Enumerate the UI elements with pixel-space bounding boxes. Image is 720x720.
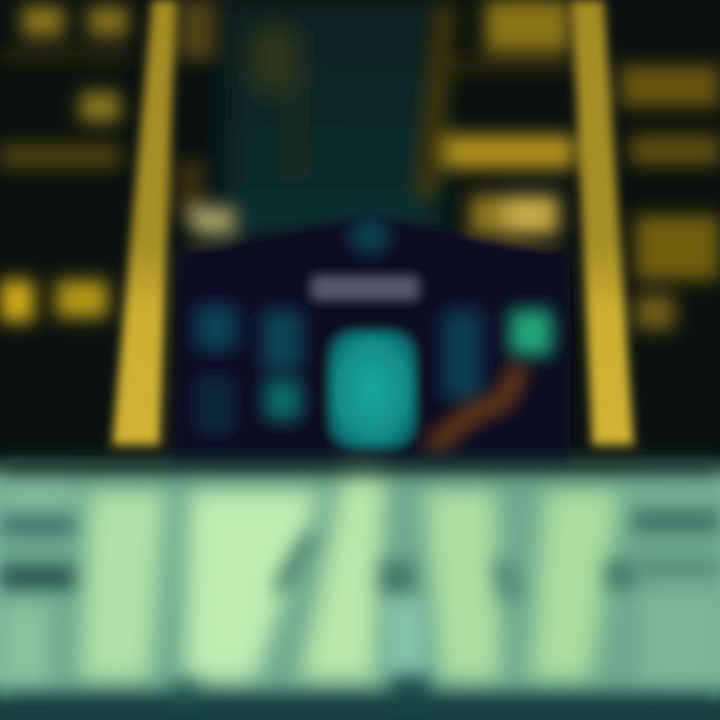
bank building [172,214,570,462]
left column [112,0,176,445]
bottom dark band [0,458,720,720]
building body [172,214,570,462]
central night sky [225,0,440,240]
right column [572,0,634,445]
light green pavement [0,458,720,720]
orange trend line [430,365,520,448]
right tower windows [415,0,720,330]
right windows [442,310,552,400]
left windows [195,305,302,435]
left tower windows [0,0,234,322]
pavement highlights [0,468,720,690]
roof peak glow [350,218,390,254]
door [330,332,415,447]
pavement dark stripes [0,510,720,680]
name plate [312,277,418,299]
